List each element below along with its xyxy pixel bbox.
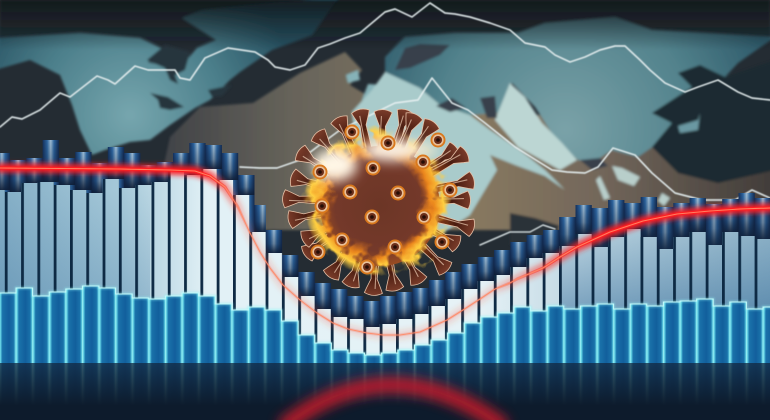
map: top shade bbox=[0, 0, 770, 50]
trend line: upper bbox=[0, 3, 770, 127]
bar chart bbox=[0, 140, 770, 420]
map: Asia dark coast bbox=[652, 60, 770, 183]
back bars: blue upper sections, left bbox=[0, 140, 266, 300]
virus: body bbox=[320, 146, 440, 266]
map: inland seas bbox=[395, 44, 608, 170]
map: Africa and Europe pale landmass bbox=[352, 72, 565, 240]
map: British Isles bbox=[346, 70, 385, 106]
map: Eurasia bbox=[385, 17, 770, 163]
virus: spikes bbox=[282, 107, 476, 296]
trend line: lower bbox=[240, 78, 770, 200]
map: Hudson Bay and Great Lakes bbox=[147, 45, 232, 110]
virus: receptor rings bbox=[310, 124, 458, 274]
virus: flame patches bbox=[304, 128, 452, 276]
back bars: blue upper sections, right bbox=[266, 193, 770, 363]
virus: white highlights bbox=[313, 139, 437, 181]
front bars: glowing blue columns bbox=[0, 286, 770, 370]
back bars: pale columns bbox=[0, 169, 770, 363]
virus bbox=[282, 107, 476, 296]
map: Japan bbox=[678, 113, 700, 133]
map: Arabian pale landmass bbox=[495, 83, 577, 170]
red curve bbox=[0, 168, 770, 335]
map: dark southern patch bbox=[510, 213, 560, 245]
world map bbox=[0, 0, 770, 245]
map: North America bbox=[0, 0, 338, 155]
map: pale Indian and Southeast Asian islands bbox=[596, 166, 670, 206]
trend line: short segment bbox=[480, 225, 555, 245]
white market trend lines bbox=[0, 3, 770, 245]
floor with bar reflections bbox=[0, 363, 770, 420]
map: tan south ocean band bbox=[150, 52, 770, 230]
virus: outer glow bbox=[316, 140, 440, 264]
reflection of red curve bbox=[282, 385, 505, 420]
